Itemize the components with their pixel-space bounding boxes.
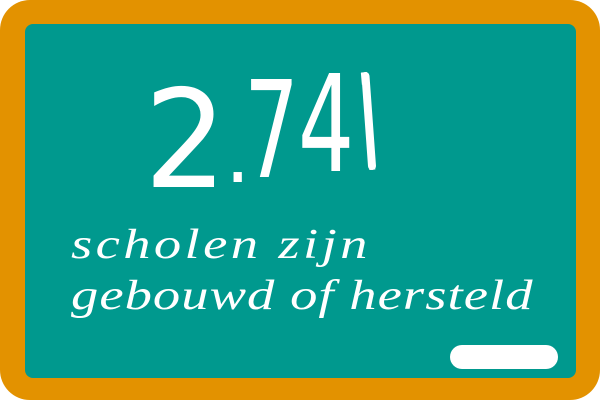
caption line 1: scholen zijn [71, 221, 367, 267]
chalk stick [450, 345, 558, 369]
big number: 2.741: 1 [339, 45, 398, 204]
caption: scholen zijn gebouwd of hersteld [71, 221, 533, 318]
caption line 2: gebouwd of hersteld [71, 272, 533, 318]
big number: 2.741 [154, 72, 376, 187]
big number: 2.741: 7 [244, 52, 299, 209]
big number: 2.741: 2 [144, 61, 227, 220]
big number: 2.741: . [225, 108, 250, 201]
big number: 2.741: 4 [298, 46, 354, 203]
